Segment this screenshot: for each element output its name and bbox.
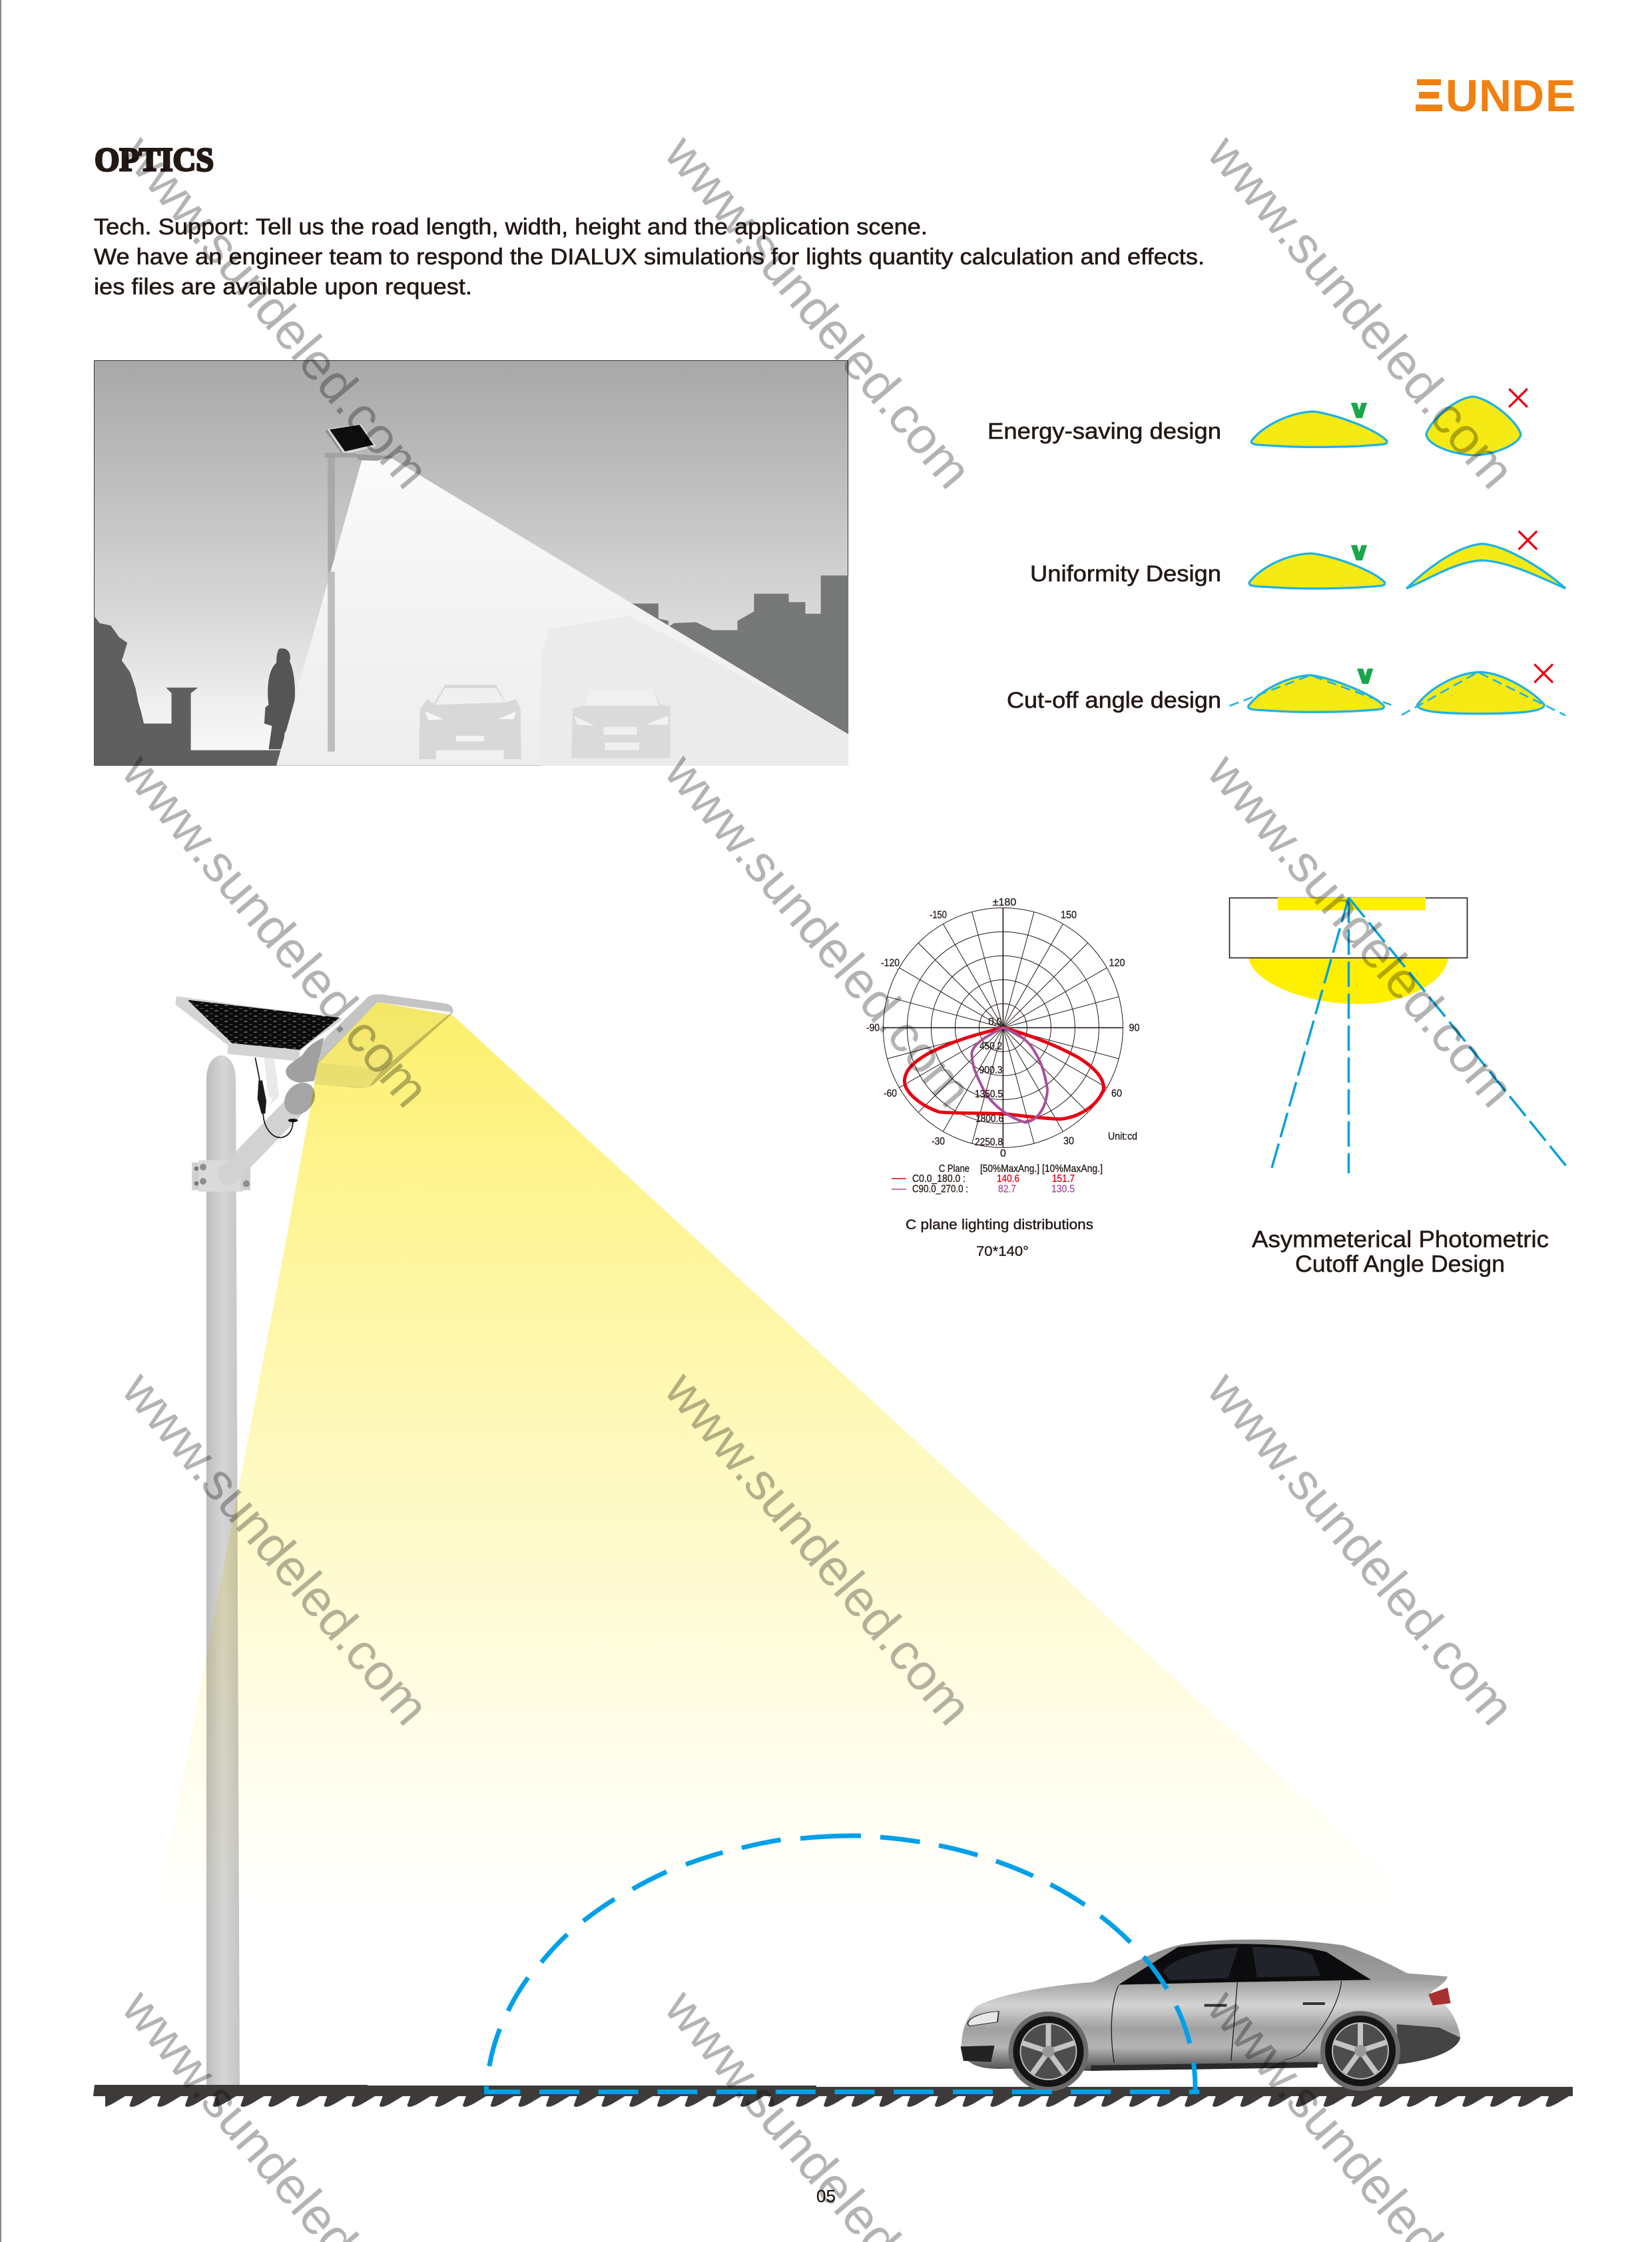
check mark — [1351, 403, 1367, 418]
polar axis labels: 150 — [1061, 910, 1077, 921]
label: cut-off angle design: Cut-off angle design — [1007, 688, 1221, 713]
ground — [93, 2085, 1573, 2108]
blue dashed light arc — [489, 1836, 1195, 2092]
left building silhouette — [94, 616, 281, 766]
good uniformity curve — [1249, 553, 1385, 589]
watermarks: www.sundeled.com — [653, 743, 983, 1118]
polar chart: C plane lighting distribution — [866, 897, 1140, 1259]
intro text block: ies files are available upon request. — [94, 274, 472, 300]
polar legend table: 130.5 — [1051, 1184, 1075, 1195]
intro text block: Tech. Support: Tell us the road length, width, height and the application scene. — [94, 214, 928, 240]
polar legend table: C90.0_270.0 : — [912, 1184, 968, 1195]
watermarks: www.sundeled.com — [653, 125, 983, 499]
rear window — [1252, 1947, 1320, 1977]
watermarks: www.sundeled.com — [111, 1361, 440, 1736]
blue dashed ground line — [484, 2086, 1199, 2094]
window surround — [1119, 1944, 1371, 1985]
beam angle caption: 70*140° — [976, 1244, 1029, 1259]
polar chart caption: C plane lighting distributions — [906, 1217, 1093, 1233]
intro text block: We have an engineer team to respond the DIALUX simulations for lights quantity calculation and effects. — [94, 244, 1205, 270]
panel: design comparison — [987, 389, 1565, 715]
watermarks: www.sundeled.com — [1196, 125, 1525, 499]
far skyline silhouette — [630, 575, 848, 734]
solar panel frame — [175, 996, 343, 1061]
taillight — [1428, 1988, 1451, 2006]
polar axis labels: 1800.6 — [975, 1113, 1003, 1125]
diagram caption: Cutoff Angle Design — [1295, 1251, 1505, 1277]
cross mark — [1519, 531, 1537, 549]
good energy-saving curve — [1251, 412, 1387, 447]
lower rear bumper — [1397, 2024, 1460, 2064]
polar legend table: [10%MaxAng.] — [1042, 1163, 1103, 1175]
logo: SUNDE: UNDE — [1446, 71, 1575, 121]
panel: grayscale street scene photo — [94, 361, 848, 766]
polar legend table: C0.0_180.0 : — [912, 1173, 965, 1185]
intro text block — [94, 214, 1205, 300]
watermarks: www.sundeled.com — [111, 125, 440, 499]
watermarks: www.sundeled.com — [1196, 743, 1525, 1118]
panel bracket — [264, 1057, 279, 1104]
polar axis labels: -30 — [932, 1136, 945, 1147]
door handles — [1205, 2004, 1325, 2006]
check mark — [1351, 545, 1367, 561]
solar panel — [326, 424, 376, 458]
polar axis labels: 120 — [1109, 958, 1125, 969]
walking person — [264, 649, 295, 749]
light pole — [328, 457, 335, 752]
diagram caption: Asymmeterical Photometric — [1252, 1227, 1549, 1253]
support arm — [229, 1101, 300, 1174]
check mark — [1357, 669, 1373, 684]
bad uniformity curve — [1406, 544, 1565, 589]
polar legend table: 140.6 — [997, 1173, 1019, 1185]
LED strip — [1278, 898, 1426, 910]
car one — [419, 685, 521, 759]
polar axis labels: ±180 — [993, 897, 1016, 908]
purple curve C90-270 — [971, 1027, 1047, 1123]
lamp neck — [286, 1037, 324, 1083]
polar axis labels: 60 — [1111, 1088, 1122, 1099]
diagram: asymmetrical cutoff angle — [1229, 898, 1566, 1173]
polar legend table — [892, 1163, 1103, 1195]
diagram caption — [1252, 1227, 1549, 1277]
red curve C0-180 — [904, 1027, 1103, 1119]
car two — [571, 689, 671, 758]
pole — [206, 1055, 240, 2087]
front window — [1163, 1948, 1239, 1980]
lens lower lip — [314, 1063, 382, 1087]
light beam — [276, 459, 848, 766]
polar axis labels: 1350.5 — [975, 1089, 1003, 1100]
luminaire outline — [1229, 898, 1468, 958]
polar axis labels: 900.3 — [979, 1065, 1003, 1076]
door seams — [1111, 1981, 1342, 2063]
bad cut-off dashed guide — [1402, 672, 1565, 715]
dashed cutoff rays — [1270, 898, 1566, 1173]
headlight — [967, 2012, 999, 2026]
polar axis labels: 0 — [1000, 1148, 1006, 1159]
polar axis labels: Unit:cd — [1108, 1131, 1137, 1143]
label: uniformity design: Uniformity Design — [1030, 561, 1221, 587]
polar legend table: [50%MaxAng.] — [980, 1163, 1039, 1175]
polar axis labels — [866, 897, 1140, 1159]
cross mark — [1534, 664, 1553, 683]
polar legend table: 82.7 — [998, 1184, 1016, 1195]
polar axis labels: 2250.8 — [975, 1137, 1003, 1148]
watermarks: www.sundeled.com — [653, 1361, 983, 1736]
polar axis labels: -150 — [930, 910, 947, 921]
watermarks: www.sundeled.com — [111, 743, 440, 1118]
side skirt — [1091, 2062, 1318, 2071]
polar axis labels: 450.2 — [979, 1041, 1002, 1052]
polar legend table: 151.7 — [1052, 1173, 1075, 1185]
lamp arm and head — [325, 453, 394, 461]
watermarks: www.sundeled.com — [1196, 1361, 1525, 1736]
good cut-off dashed guide — [1230, 675, 1391, 706]
collar — [278, 1077, 322, 1121]
polar axis labels: -90 — [866, 1023, 880, 1033]
car — [961, 1940, 1460, 2071]
polar legend table: C Plane — [939, 1163, 969, 1175]
label: energy-saving design: Energy-saving design — [987, 419, 1221, 444]
front grille — [961, 2046, 995, 2062]
clamp — [192, 1160, 250, 1192]
polar axis labels: -120 — [881, 958, 900, 969]
page number: 05 — [816, 2186, 836, 2206]
solar street lamp — [175, 994, 453, 1192]
polar axis labels: 30 — [1063, 1136, 1074, 1147]
good cut-off curve — [1248, 675, 1384, 712]
cable connector — [258, 1081, 266, 1114]
car body — [962, 1940, 1460, 2071]
cross mark — [1509, 389, 1527, 407]
lens lobe — [1248, 958, 1448, 1004]
title: OPTICS — [95, 140, 214, 178]
front wheel — [1008, 2012, 1088, 2092]
bad energy-saving curve — [1426, 397, 1521, 455]
page edge line — [0, 0, 1, 2242]
polar axis labels: 90 — [1129, 1023, 1140, 1033]
polar axis labels: -60 — [884, 1088, 897, 1099]
rear wheel — [1320, 2011, 1400, 2091]
solar panel cells — [188, 1000, 340, 1050]
cable — [255, 1057, 293, 1137]
bad cut-off curve — [1418, 672, 1544, 714]
lamp lens — [318, 1002, 451, 1070]
yellow light beam — [156, 1002, 1398, 1918]
faint buildings in beam — [541, 616, 848, 766]
polar axis labels: 0.0 — [988, 1016, 1002, 1028]
lamp housing — [315, 994, 453, 1088]
